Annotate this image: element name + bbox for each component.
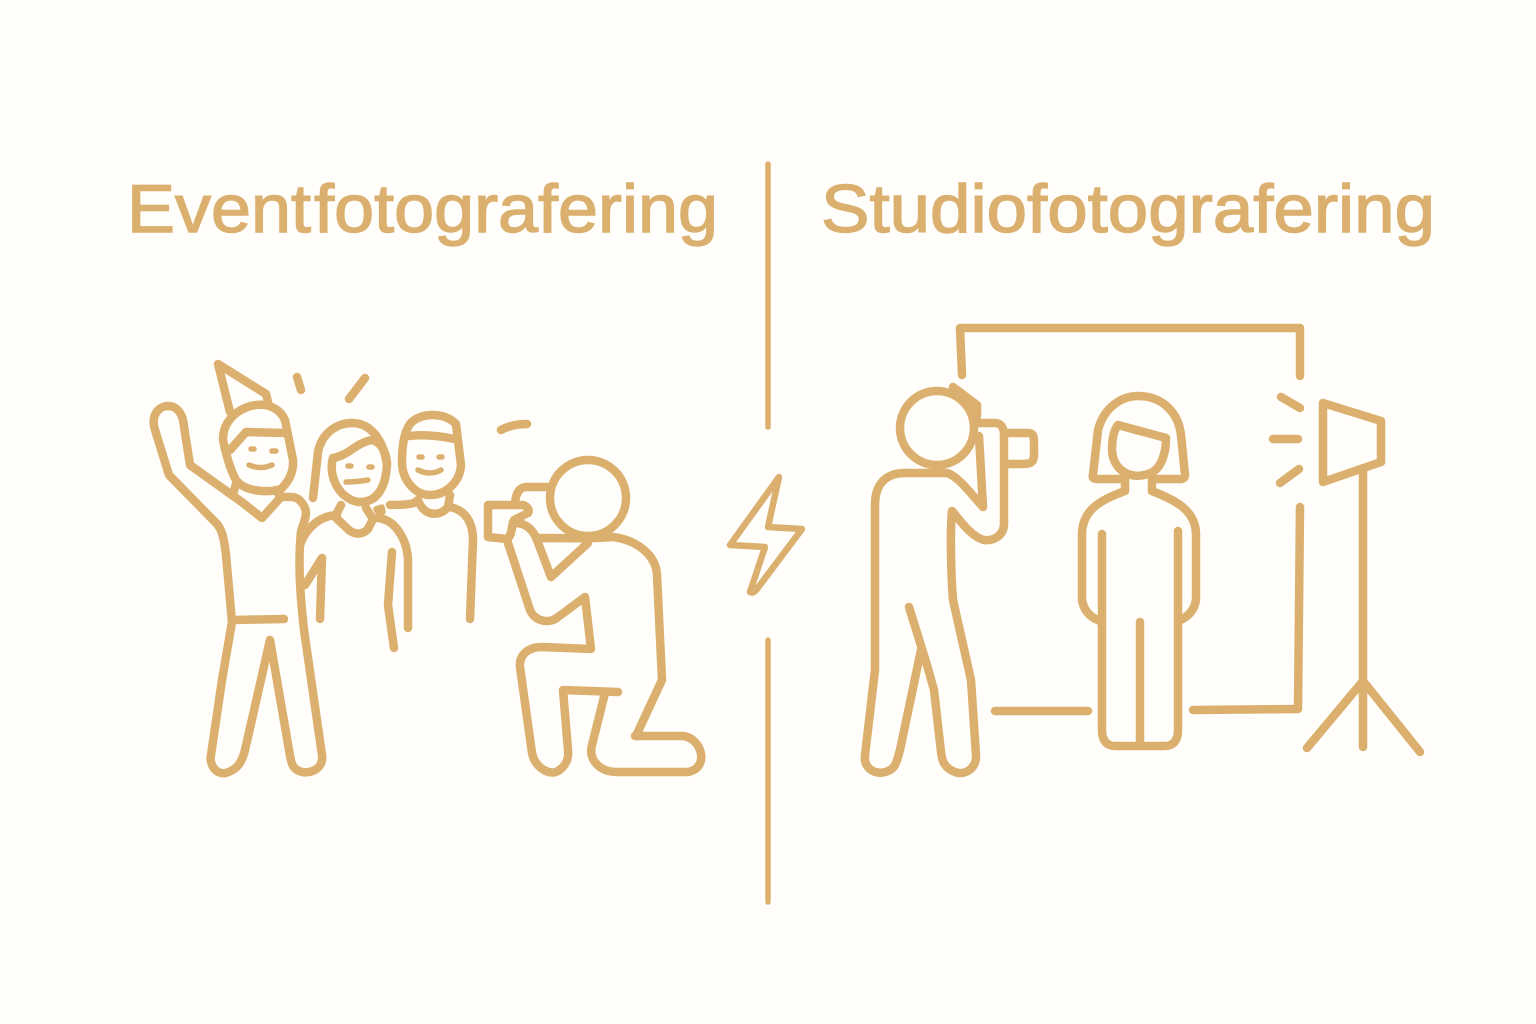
confetti marks — [297, 377, 527, 430]
party hat — [218, 364, 268, 412]
third person collar and shoulders — [390, 495, 473, 619]
waving person face — [249, 449, 276, 468]
waving person waist — [232, 619, 284, 620]
divider: lower line — [765, 640, 771, 902]
waving person head — [223, 405, 293, 491]
divider: upper line — [765, 164, 771, 427]
middle person left arm — [305, 558, 322, 619]
head — [900, 391, 974, 465]
model inner legs — [1102, 531, 1178, 746]
middle person body — [300, 515, 408, 628]
head — [550, 460, 626, 536]
heading: Eventfotografering: Eventfotografering — [127, 171, 718, 247]
flash marks — [1273, 397, 1300, 483]
icon: lightning bolt — [730, 477, 802, 593]
middle person fringe — [333, 440, 387, 463]
camera body — [909, 423, 1004, 773]
illustration: event group — [154, 364, 527, 773]
light stand — [1307, 472, 1420, 752]
waving person body — [154, 406, 322, 773]
heading: Studiofotografering: Studiofotografering — [821, 171, 1435, 247]
camera — [488, 487, 549, 539]
middle person face — [332, 458, 387, 502]
hair tuft — [953, 387, 977, 416]
middle person collar — [335, 505, 373, 534]
model neck and body — [1082, 480, 1196, 621]
lower leg — [591, 693, 701, 772]
studio softbox — [1323, 403, 1381, 482]
forearm inner — [517, 523, 662, 736]
waving person hair — [230, 432, 285, 450]
third person features — [418, 457, 442, 473]
third person cap line — [409, 435, 455, 439]
model face — [1112, 425, 1166, 476]
raised arm — [865, 436, 983, 773]
middle person right arm — [388, 552, 394, 648]
small confetti between heads — [376, 507, 383, 513]
middle person features — [346, 466, 372, 482]
waving person neck — [234, 484, 280, 497]
model hair — [1093, 396, 1185, 479]
illustration: kneeling photographer — [488, 460, 701, 772]
camera lens — [1008, 433, 1034, 464]
backdrop frame — [960, 328, 1300, 711]
third person head — [402, 415, 461, 495]
middle person hair outer — [313, 423, 387, 498]
illustration: studio photographer — [865, 328, 1420, 773]
arm and torso — [507, 540, 618, 772]
